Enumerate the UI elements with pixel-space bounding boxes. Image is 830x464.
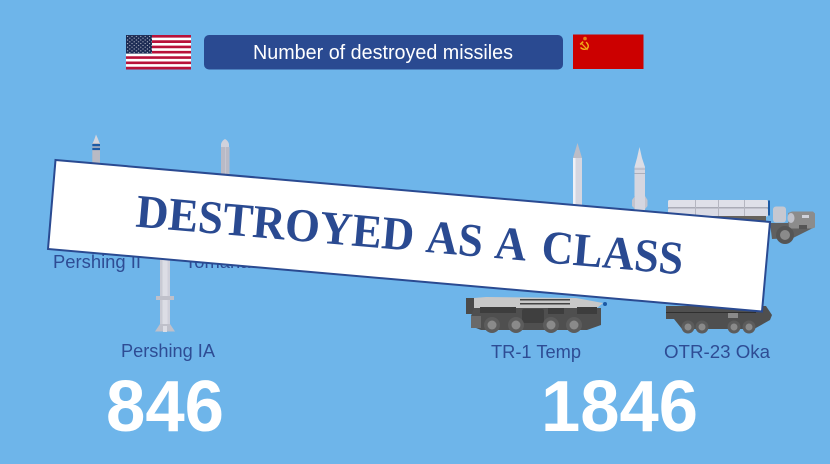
- heading bar: Number of destroyed missiles: [253, 42, 513, 64]
- banner: destroyed as a class: A: [493, 217, 529, 272]
- icon: US flag: [126, 35, 191, 70]
- banner: destroyed as a class: CLASS: [539, 221, 685, 285]
- icon: USSR flag: [573, 34, 644, 69]
- label: TR-1 Temp: TR-1 Temp: [491, 342, 581, 362]
- number: US missiles destroyed: 846: [106, 367, 224, 447]
- number: USSR missiles destroyed: 1846: [541, 367, 698, 447]
- banner: destroyed as a class: [48, 160, 770, 312]
- banner: destroyed as a class: AS: [424, 211, 485, 268]
- missile: Pershing IA: [155, 255, 175, 332]
- missile: Pershing II: [92, 134, 100, 180]
- label: OTR-23 Oka: OTR-23 Oka: [664, 342, 771, 362]
- label: Pershing IA: Pershing IA: [121, 341, 215, 361]
- missile: OTR-23 Oka: [632, 147, 648, 217]
- missile: TR-1 Temp: [573, 143, 582, 218]
- vehicle: TR-1 Temp launcher truck: [466, 297, 607, 333]
- missile: Tomahawk: [221, 139, 230, 187]
- heading bar: [204, 35, 563, 70]
- vehicle: launcher truck with missile canisters: [668, 200, 815, 244]
- label: Pershing II: Pershing II: [53, 252, 141, 272]
- vehicle: OTR-23 Oka launcher truck: [666, 306, 772, 334]
- banner: destroyed as a class: DESTROYED: [134, 186, 417, 262]
- label: Tomahawk: Tomahawk: [185, 252, 274, 272]
